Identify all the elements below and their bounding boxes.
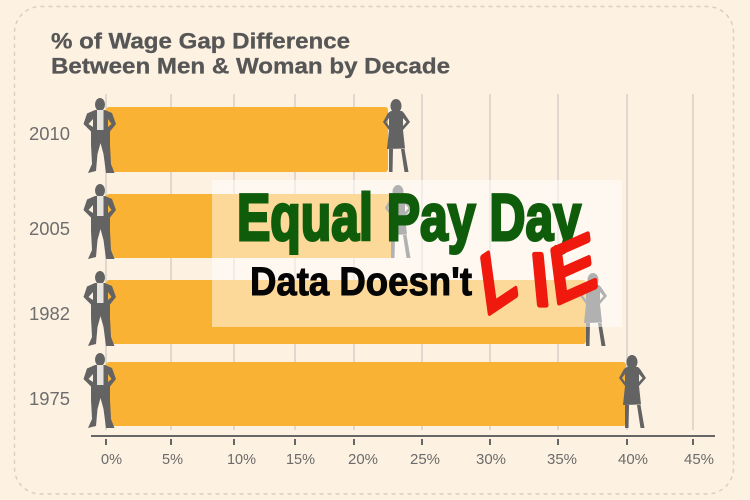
overlay subheading: Data Doesn't	[250, 260, 472, 304]
x axis labels: 25%	[410, 451, 440, 468]
x axis ticks	[106, 439, 693, 445]
handwritten word: LIE	[475, 216, 600, 334]
bar: 2005	[106, 194, 392, 258]
icon: man 2010	[84, 98, 116, 173]
bar: 1982	[106, 280, 586, 344]
chart title: % of Wage Gap Difference	[51, 28, 350, 54]
bar: 2010	[106, 107, 388, 172]
icon: man 1975	[84, 353, 116, 428]
chart title: Between Men & Woman by Decade	[51, 54, 450, 78]
x axis labels: 0%	[101, 451, 122, 468]
icon: woman 1975	[619, 355, 646, 428]
chart title	[51, 28, 450, 78]
x axis labels	[101, 451, 714, 468]
vertical grid lines	[106, 94, 693, 430]
icon: woman 1982	[580, 273, 607, 346]
icon: woman 2005	[385, 185, 412, 258]
handwritten word: LIE: I	[527, 240, 554, 321]
year labels	[29, 124, 70, 409]
icon: woman 2010	[383, 99, 410, 172]
icon: man 1982	[84, 271, 116, 346]
x axis labels: 35%	[547, 451, 577, 468]
x axis labels: 10%	[227, 451, 256, 468]
x axis labels: 45%	[684, 451, 714, 468]
x axis labels: 20%	[348, 451, 378, 468]
x axis line	[91, 435, 715, 437]
year labels: 2010	[29, 124, 70, 144]
handwritten word: LIE: E	[545, 216, 600, 321]
icon: man 2005	[84, 184, 116, 259]
translucent overlay panel	[212, 180, 622, 327]
bar: 1975	[106, 362, 626, 426]
x axis labels: 5%	[162, 451, 183, 468]
year labels: 2005	[29, 219, 70, 239]
x axis labels: 40%	[618, 451, 648, 468]
x axis labels: 30%	[476, 451, 506, 468]
year labels: 1975	[29, 389, 70, 409]
handwritten word: LIE: L	[475, 222, 521, 334]
x axis labels: 15%	[286, 451, 315, 468]
overlay heading: Equal Pay Day	[237, 180, 581, 254]
year labels: 1982	[29, 304, 70, 324]
